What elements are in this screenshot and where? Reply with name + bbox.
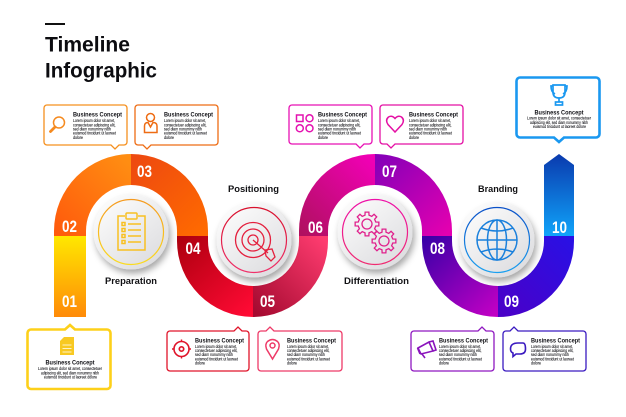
card: document: adipiscing elit, sed diam nonummy nibh (41, 370, 100, 375)
card: heart: euismod tincidunt ut laoreet (409, 131, 453, 136)
card: map pin: dolore (287, 360, 298, 366)
icon: heart (387, 116, 403, 132)
card: megaphone: sed diam nonummy nibh (439, 352, 478, 357)
segment 05 (253, 236, 328, 317)
card: person: euismod tincidunt ut laoreet (164, 131, 208, 136)
card: shapes: consectetuer adipiscing elit, (318, 122, 360, 127)
card: crosshair: dolore (195, 360, 206, 366)
disc: preparation (94, 194, 168, 270)
title (45, 23, 157, 82)
segment 07 (375, 154, 452, 236)
card: map pin: Business Concept (287, 337, 337, 344)
icon: crosshair (172, 340, 191, 358)
card: speech bubble (503, 327, 586, 371)
card: shapes: euismod tincidunt ut laoreet (318, 131, 362, 136)
card: heart: Business Concept (409, 112, 459, 118)
icon: shapes (296, 115, 313, 132)
card: document (28, 325, 110, 389)
card: crosshair: Business Concept (195, 337, 245, 344)
segment 01: 01 (62, 292, 77, 311)
title: Infographic (45, 60, 157, 82)
segment 06 (299, 154, 375, 237)
card: search: consectetuer adipiscing elit, (73, 122, 116, 127)
segment 03 (131, 154, 208, 236)
segment 01 (54, 236, 86, 317)
segment 03: 03 (137, 162, 152, 181)
card: heart (380, 105, 463, 148)
label: positioning: Positioning (228, 184, 279, 195)
card: person: consectetuer adipiscing elit, (164, 122, 206, 127)
segment 08: 08 (430, 239, 445, 258)
card: document: Business Concept (46, 359, 95, 366)
card: speech bubble: dolore (531, 360, 542, 366)
icon: clipboard (118, 213, 145, 250)
card: megaphone: dolore (439, 360, 450, 366)
card: speech bubble: consectetuer adipiscing elit, (531, 348, 574, 353)
card: heart: consectetuer adipiscing elit, (409, 122, 452, 127)
card: map pin (258, 327, 342, 371)
card: person: sed diam nonummy nibh (164, 126, 203, 132)
label: preparation: Preparation (105, 276, 157, 287)
segment 07: 07 (382, 162, 397, 181)
card: map pin: euismod tincidunt ut laoreet (287, 356, 331, 361)
icon: person (144, 114, 157, 132)
card: trophy: euismod tincidunt ut laoreet dolore (533, 124, 587, 129)
card: search (44, 105, 127, 149)
segment 06: 06 (308, 218, 323, 237)
disc: branding (460, 202, 534, 278)
card: map pin: Lorem ipsum dolor sit amet, (287, 344, 329, 349)
segment 04 (177, 236, 253, 317)
card: crosshair: euismod tincidunt ut laoreet (195, 356, 239, 361)
card: shapes (289, 105, 372, 148)
card: speech bubble: Business Concept (531, 337, 581, 344)
card: shapes: dolore (318, 135, 329, 140)
card: speech bubble: Lorem ipsum dolor sit amet, (531, 344, 573, 349)
card: trophy: Business Concept (534, 110, 584, 116)
card: shapes: Business Concept (318, 112, 368, 118)
segment 04: 04 (186, 239, 201, 258)
card: search: Lorem ipsum dolor sit amet, (73, 118, 115, 123)
card: heart: sed diam nonummy nibh (409, 126, 448, 132)
icon: trophy (551, 85, 567, 105)
icon: magnifier (50, 117, 64, 132)
segment 10 arrow (544, 154, 574, 237)
card: trophy (516, 78, 600, 142)
card: search: dolore (73, 135, 84, 140)
timeline ribbon (54, 154, 574, 317)
card: megaphone: euismod tincidunt ut laoreet (439, 356, 483, 361)
segment 05: 05 (260, 292, 275, 311)
card: document: euismod tincidunt ut laoreet dolore (44, 374, 98, 380)
card: search: Business Concept (73, 112, 123, 118)
card: megaphone (411, 327, 494, 371)
disc: differentiation (338, 194, 412, 270)
card: heart: dolore (409, 135, 420, 140)
card: speech bubble: sed diam nonummy nibh (531, 352, 570, 357)
card: search: euismod tincidunt ut laoreet (73, 131, 117, 136)
card: crosshair (167, 327, 249, 371)
icon: gears (355, 212, 396, 253)
icon: map pin (266, 340, 279, 359)
card: person: dolore (164, 135, 175, 140)
card: crosshair: consectetuer adipiscing elit, (195, 348, 238, 353)
card: person: Business Concept (164, 112, 214, 118)
card: document: Lorem ipsum dolor sit amet, consectetuer (38, 366, 102, 371)
segment 10 arrow: 10 (552, 218, 567, 237)
icon: document (60, 337, 74, 355)
disc: positioning (216, 202, 292, 278)
card: crosshair: Lorem ipsum dolor sit amet, (195, 344, 237, 349)
icon: globe (477, 220, 517, 260)
card: speech bubble: euismod tincidunt ut laoreet (531, 356, 575, 361)
label: differentiation: Differentiation (344, 276, 409, 287)
icon: target (236, 222, 275, 261)
segment 08 (422, 236, 498, 317)
icon: speech bubble (510, 343, 526, 356)
card: person (135, 105, 218, 149)
card: shapes: Lorem ipsum dolor sit amet, (318, 118, 360, 123)
card: search: sed diam nonummy nibh (73, 126, 112, 132)
card: map pin: sed diam nonummy nibh (287, 352, 326, 357)
segment 02: 02 (62, 217, 77, 236)
card: crosshair: sed diam nonummy nibh (195, 352, 234, 357)
icon: megaphone (418, 341, 436, 358)
card: megaphone: consectetuer adipiscing elit, (439, 348, 482, 353)
card: trophy: adipiscing elit, sed diam nonummy nibh (530, 120, 589, 125)
segment 09 (498, 236, 574, 317)
card: map pin: consectetuer adipiscing elit, (287, 348, 330, 353)
title: Timeline (45, 34, 130, 56)
segment 02 (54, 154, 131, 236)
card: megaphone: Business Concept (439, 337, 489, 344)
card: shapes: sed diam nonummy nibh (318, 126, 357, 132)
card: person: Lorem ipsum dolor sit amet, (164, 118, 206, 123)
label: branding: Branding (478, 184, 518, 195)
card: trophy: Lorem ipsum dolor sit amet, consectetuer (527, 116, 591, 120)
card: megaphone: Lorem ipsum dolor sit amet, (439, 344, 481, 349)
card: heart: Lorem ipsum dolor sit amet, (409, 118, 451, 123)
segment 09: 09 (504, 292, 519, 311)
